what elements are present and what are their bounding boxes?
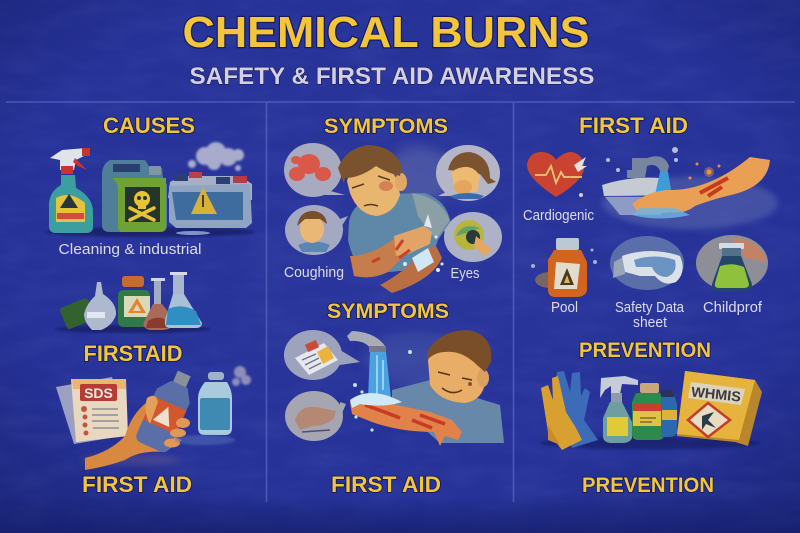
bubble: eyes xyxy=(441,212,502,262)
icon: green bottle xyxy=(632,383,677,440)
icon: spray bottle xyxy=(49,148,93,233)
bubble: pig-shaped lesion xyxy=(285,391,346,441)
heading: prevention: PREVENTION xyxy=(579,338,711,362)
panel: causes xyxy=(45,113,255,497)
label: sheet: sheet xyxy=(633,315,667,331)
bubble: rash xyxy=(284,143,345,197)
label: pool: Pool xyxy=(551,300,578,316)
icon: whmis binder xyxy=(677,371,762,446)
icon: heart with pulse xyxy=(527,152,587,197)
label: childproof: Childprof xyxy=(703,300,763,316)
panel: first aid and prevention xyxy=(523,113,778,497)
label: cleaning: Cleaning & industrial xyxy=(58,241,202,258)
title: CHEMICAL BURNS xyxy=(182,8,590,57)
heading: causes: CAUSES xyxy=(103,113,195,138)
icon: wash bottle with vapour xyxy=(175,366,251,445)
heading: prevention bottom: PREVENTION xyxy=(582,473,714,497)
label: coughing: Coughing xyxy=(284,265,344,281)
bubble: girl covering face xyxy=(436,145,500,201)
illustration: boy rinsing arm xyxy=(350,330,504,446)
icon: hand holding bottle xyxy=(80,366,200,470)
icon: car battery with smoke xyxy=(168,142,252,235)
heading: symptoms second: SYMPTOMS xyxy=(327,299,449,323)
icon: gloves xyxy=(541,371,598,450)
bubble: green flask xyxy=(696,235,768,291)
panel: symptoms xyxy=(284,113,504,497)
icon: safety goggles xyxy=(610,236,684,290)
subtitle: SAFETY & FIRST AID AWARENESS xyxy=(190,63,594,90)
heading: symptoms: SYMPTOMS xyxy=(324,113,448,138)
icon: safety data sheet: SDS xyxy=(84,385,113,401)
icon: chemical containers xyxy=(59,272,202,330)
heading: first aid right: FIRST AID xyxy=(579,113,688,138)
illustration: boy with burned arm xyxy=(338,145,450,293)
label: eyes: Eyes xyxy=(450,266,480,282)
heading: first aid bottom centre: FIRST AID xyxy=(331,472,441,497)
bubble: coughing child xyxy=(285,205,348,255)
heading: first aid bottom left: FIRST AID xyxy=(82,472,192,497)
heading: first aid left: FIRSTAID xyxy=(84,341,182,366)
bubble: data sheet xyxy=(284,330,360,380)
icon: spray bottle yellow xyxy=(600,376,638,443)
icon: sink, faucet and burned hand xyxy=(602,147,778,229)
label: cardiogenic: Cardiogenic xyxy=(523,208,594,224)
icon: whmis binder: WHMIS xyxy=(690,383,742,405)
icon: orange bottle xyxy=(531,238,597,297)
label: safety data sheet: Safety Data xyxy=(615,300,685,316)
icon: poison jug xyxy=(102,160,167,232)
icon: safety data sheet xyxy=(56,377,128,444)
icon: faucet and running water xyxy=(347,331,391,398)
